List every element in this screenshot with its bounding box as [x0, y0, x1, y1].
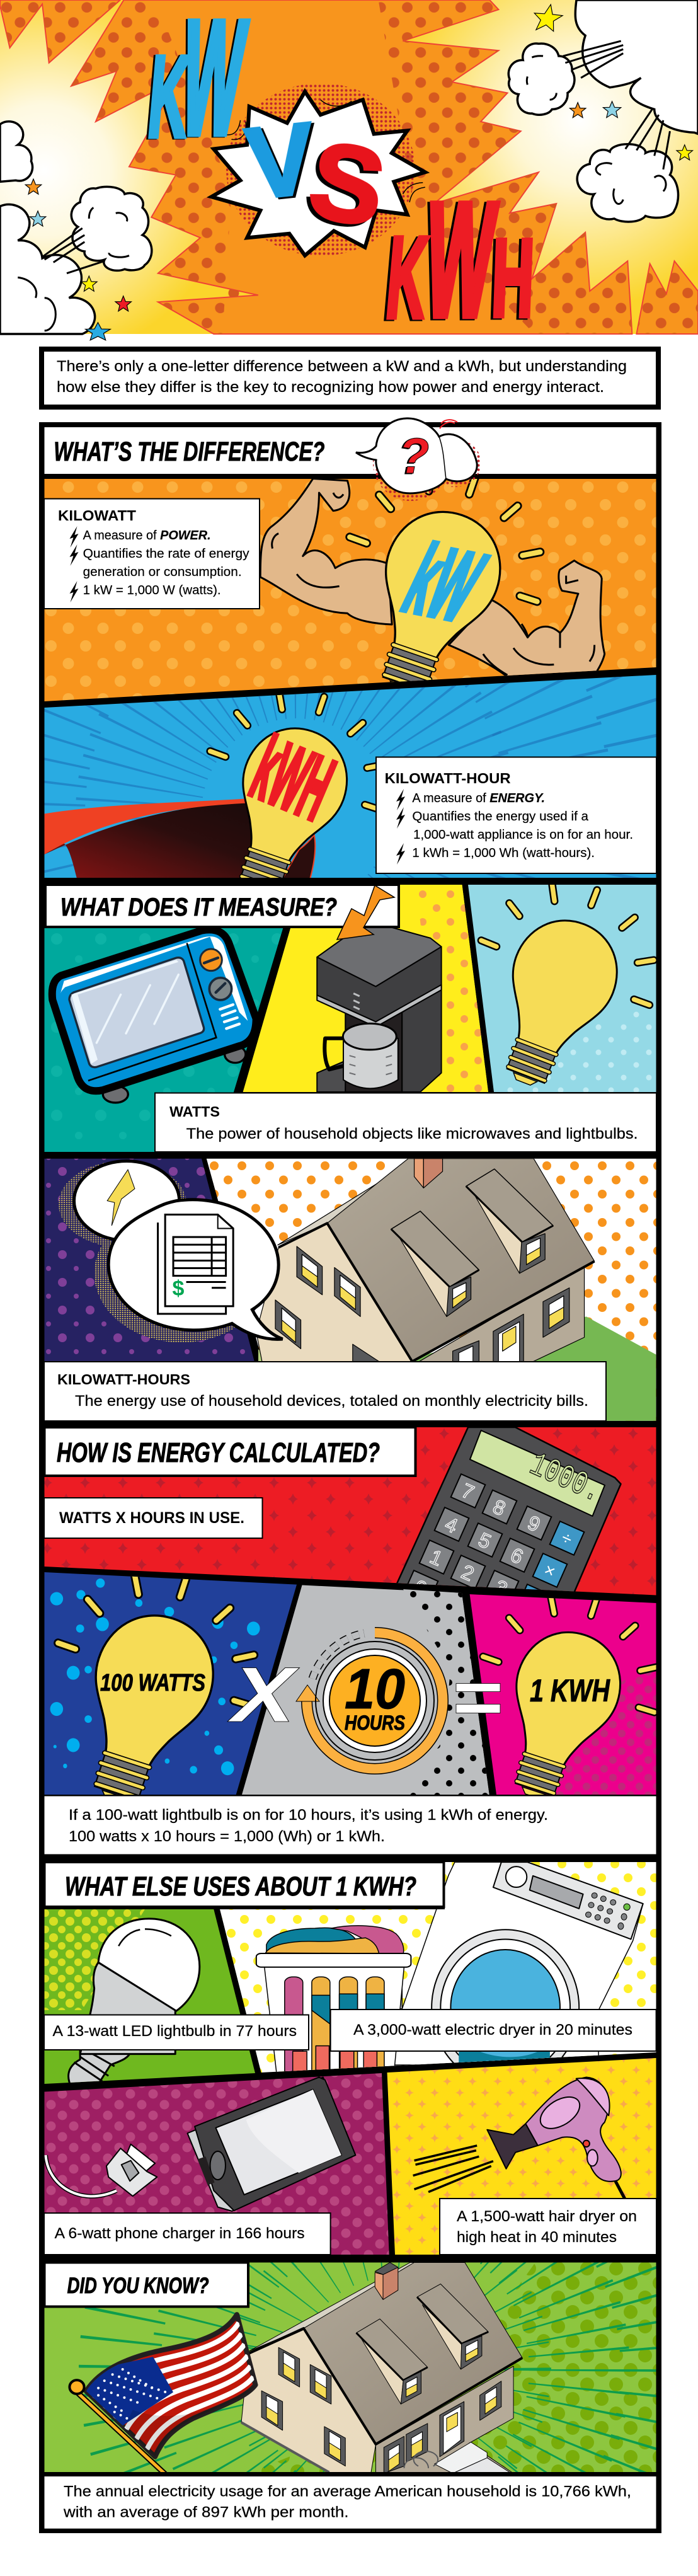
phone charger text box — [44, 2213, 331, 2255]
icon: dollar sign: $ — [173, 1277, 185, 1301]
blue panel dots — [50, 1578, 260, 1775]
section: how is energy calculated — [14, 1427, 686, 1854]
icon: calculator: 9 — [524, 1511, 544, 1536]
icon: lightbulb — [478, 885, 656, 1086]
VS burst — [212, 91, 425, 256]
VS letters: V — [241, 101, 320, 220]
did you know text box: with an average of 897 kWh per month. — [63, 2504, 349, 2521]
dryer text box — [331, 2010, 656, 2051]
panel: magenta phone — [44, 2073, 389, 2255]
panel: teal microwave — [44, 885, 296, 1152]
icon: clock with 10 hours — [296, 1633, 443, 1769]
hair dryer text box: A 1,500-watt hair dryer on — [457, 2208, 637, 2225]
kilowatt text box: generation or consumption. — [83, 565, 242, 579]
hair dryer text box — [440, 2199, 656, 2255]
watts text box — [155, 1093, 656, 1152]
panel: red — [44, 1427, 656, 1596]
icon: kW lightbulb — [345, 479, 544, 682]
icon: clock with 10 hours: HOURS — [345, 1711, 406, 1734]
icon: microwave — [52, 929, 256, 1103]
icon: question speech bubble — [356, 418, 481, 501]
heading: did you know: DID YOU KNOW? — [67, 2274, 209, 2298]
hero orange burst — [0, 0, 698, 334]
kWH title: H — [490, 217, 536, 339]
kW title: K — [144, 33, 194, 161]
kilowatt-hour text box: A measure of ENERGY. — [412, 791, 545, 805]
stars — [25, 3, 692, 340]
icon: calculator: 2 — [458, 1560, 478, 1585]
VS letters — [241, 101, 393, 250]
watts text box: The power of household objects like microwaves and lightbulbs. — [186, 1125, 638, 1142]
heading: what else uses about 1 kWh: WHAT ELSE USES ABOUT 1 KWH? — [65, 1872, 416, 1902]
icon: cape — [45, 798, 315, 878]
kWH title — [382, 170, 536, 349]
blue panel speed lines — [44, 677, 656, 878]
multiply sign: X — [227, 1652, 300, 1739]
intro text box — [42, 349, 658, 407]
intro text box: how else they differ is the key to recognizing how power and energy interact. — [57, 379, 604, 396]
kilowatt-hour text box: 1,000-watt appliance is on for an hour. — [413, 828, 633, 842]
panel: 10 hours grey — [242, 1585, 489, 1795]
halftone behind VS — [226, 83, 415, 256]
icon: calculator: 1 — [426, 1545, 446, 1570]
formula text box: If a 100-watt lightbulb is on for 10 hours, it’s using 1 kWh of energy. — [69, 1807, 548, 1824]
icon: question speech bubble: ? — [399, 428, 429, 484]
light blue panel dots — [504, 1002, 656, 1092]
kilowatt text box: 1 kW = 1,000 W (watts). — [83, 584, 221, 597]
formula text box — [44, 1796, 656, 1854]
icon: hair dryer — [413, 2077, 625, 2199]
panel: purple — [44, 1159, 255, 1361]
icon: calculator: 1000. — [524, 1446, 607, 1512]
kWH title: W — [419, 170, 501, 349]
icon: coffee maker — [317, 921, 442, 1092]
section: what's the difference — [44, 417, 656, 878]
icon: dryer and laundry basket — [256, 1862, 643, 2085]
LED text box: A 13-watt LED lightbulb in 77 hours — [53, 2023, 297, 2040]
kilowatt-hour text box: Quantifies the energy used if a — [412, 810, 589, 824]
heading: how is energy calculated — [44, 1427, 416, 1476]
icon: calculator: ÷ — [558, 1527, 575, 1550]
icon: calculator — [396, 1427, 622, 1592]
icon: 1 kWh bulb: 1 KWH — [530, 1673, 610, 1708]
did you know text box — [44, 2476, 656, 2529]
hero banner — [0, 0, 698, 349]
section: kilowatt-hours bill and house — [44, 1159, 656, 1425]
green panel dots and speed lines — [120, 2098, 661, 2576]
illustration: house — [256, 1159, 656, 1425]
heading: what does it measure: WHAT DOES IT MEASURE? — [60, 894, 337, 921]
kilowatt text box — [44, 499, 260, 609]
grey panel dots — [403, 1589, 489, 1795]
icon: calculator: × — [541, 1560, 559, 1582]
kilowatt text box: KILOWATT — [58, 507, 136, 524]
phone charger text box: A 6-watt phone charger in 166 hours — [55, 2225, 305, 2242]
hero background glow — [0, 0, 698, 334]
heading: what's the difference: WHAT’S THE DIFFERENCE? — [54, 437, 324, 467]
icon: calculator: 3 — [491, 1575, 511, 1601]
kilowatt text box: Quantifies the rate of energy — [83, 547, 249, 561]
panel: 1 kWh pink — [470, 1594, 656, 1795]
did you know text box: The annual electricity usage for an average American household is 10,766 kWh, — [64, 2483, 631, 2500]
heading: what's the difference — [44, 427, 656, 474]
icon: kW lightbulb: kW — [389, 526, 499, 641]
speech bubbles: electricity bill — [59, 1161, 283, 1342]
kilowatt-hours text box: The energy use of household devices, totaled on monthly electricity bills. — [75, 1393, 588, 1410]
icon: calculator: 0 — [411, 1575, 430, 1601]
LED text box — [44, 2015, 309, 2050]
heading: what else uses about 1 kWh — [44, 1862, 443, 1907]
comic frame — [39, 422, 661, 2533]
icon: kWh lightbulb: kWH — [239, 719, 346, 838]
icon: calculator: 7 — [458, 1479, 478, 1504]
panel: white with yellow dots — [220, 1862, 656, 2073]
hair dryer text box: high heat in 40 minutes — [457, 2229, 617, 2246]
icon: LED lightbulb — [69, 1919, 200, 2084]
icon: clock with 10 hours: 10 — [345, 1658, 405, 1721]
watts x hours box: WATTS X HOURS IN USE. — [59, 1509, 244, 1527]
kilowatt-hours text box — [44, 1362, 606, 1421]
icon: calculator: 5 — [475, 1528, 495, 1553]
panel: yellow hair dryer — [387, 2058, 656, 2255]
kilowatt text box: A measure of POWER. — [83, 529, 211, 543]
icon: kWh lightbulb — [206, 693, 375, 878]
formula text box: 100 watts x 10 hours = 1,000 (Wh) or 1 kWh. — [69, 1828, 385, 1845]
panel: green LED — [44, 1909, 255, 2084]
panel: light blue lightbulb — [468, 885, 656, 1092]
section: did you know — [44, 2098, 661, 2576]
yellow panel dots — [416, 885, 488, 1092]
heading: did you know — [44, 2262, 248, 2306]
panel: green with streaks — [44, 2262, 656, 2472]
equals sign — [456, 1684, 500, 1713]
icon: calculator: 8 — [489, 1495, 509, 1520]
icon: orange arrow — [337, 885, 394, 940]
green panel dots — [44, 1909, 145, 2010]
watts x hours box — [44, 1498, 262, 1538]
kilowatt-hour text box: 1 kWh = 1,000 Wh (watt-hours). — [412, 846, 595, 860]
section: what else uses about 1 kWh — [44, 1862, 656, 2255]
heading: what does it measure — [45, 885, 399, 927]
clouds — [0, 0, 698, 334]
illustration: house and flag — [69, 2262, 522, 2474]
pink panel dots — [535, 1664, 656, 1795]
icon: calculator: 4 — [442, 1512, 461, 1538]
kilowatt-hours text box: KILOWATT-HOURS — [57, 1371, 190, 1388]
kWH title: K — [382, 214, 432, 342]
panel: white with orange dots — [207, 1159, 656, 1421]
heading: how is energy calculated: HOW IS ENERGY CALCULATED? — [57, 1437, 380, 1468]
kilowatt-hour text box — [376, 757, 656, 873]
watts text box: WATTS — [169, 1103, 220, 1120]
dryer text box: A 3,000-watt electric dryer in 20 minutes — [353, 2021, 632, 2038]
panel: 100 watts blue — [44, 1572, 297, 1795]
intro text box: There’s only a one-letter difference between a kW and a kWh, but understanding — [57, 358, 627, 375]
icon: flexing arms — [260, 478, 605, 678]
icon: 1 kWh bulb — [479, 1598, 656, 1795]
section: what does it measure — [44, 885, 656, 1152]
kilowatt-hour text box: KILOWATT-HOUR — [385, 770, 511, 786]
VS letters: S — [301, 118, 393, 250]
icon: 100 watts bulb: 100 WATTS — [100, 1670, 205, 1696]
panel: kilowatt-hour blue — [44, 675, 656, 878]
panel: yellow coffee maker — [243, 885, 488, 1092]
icon: phone and charger — [46, 2077, 355, 2211]
panel: kilowatt orange — [44, 479, 656, 701]
icon: 100 watts bulb — [54, 1577, 258, 1795]
icon: calculator: 6 — [507, 1543, 527, 1568]
